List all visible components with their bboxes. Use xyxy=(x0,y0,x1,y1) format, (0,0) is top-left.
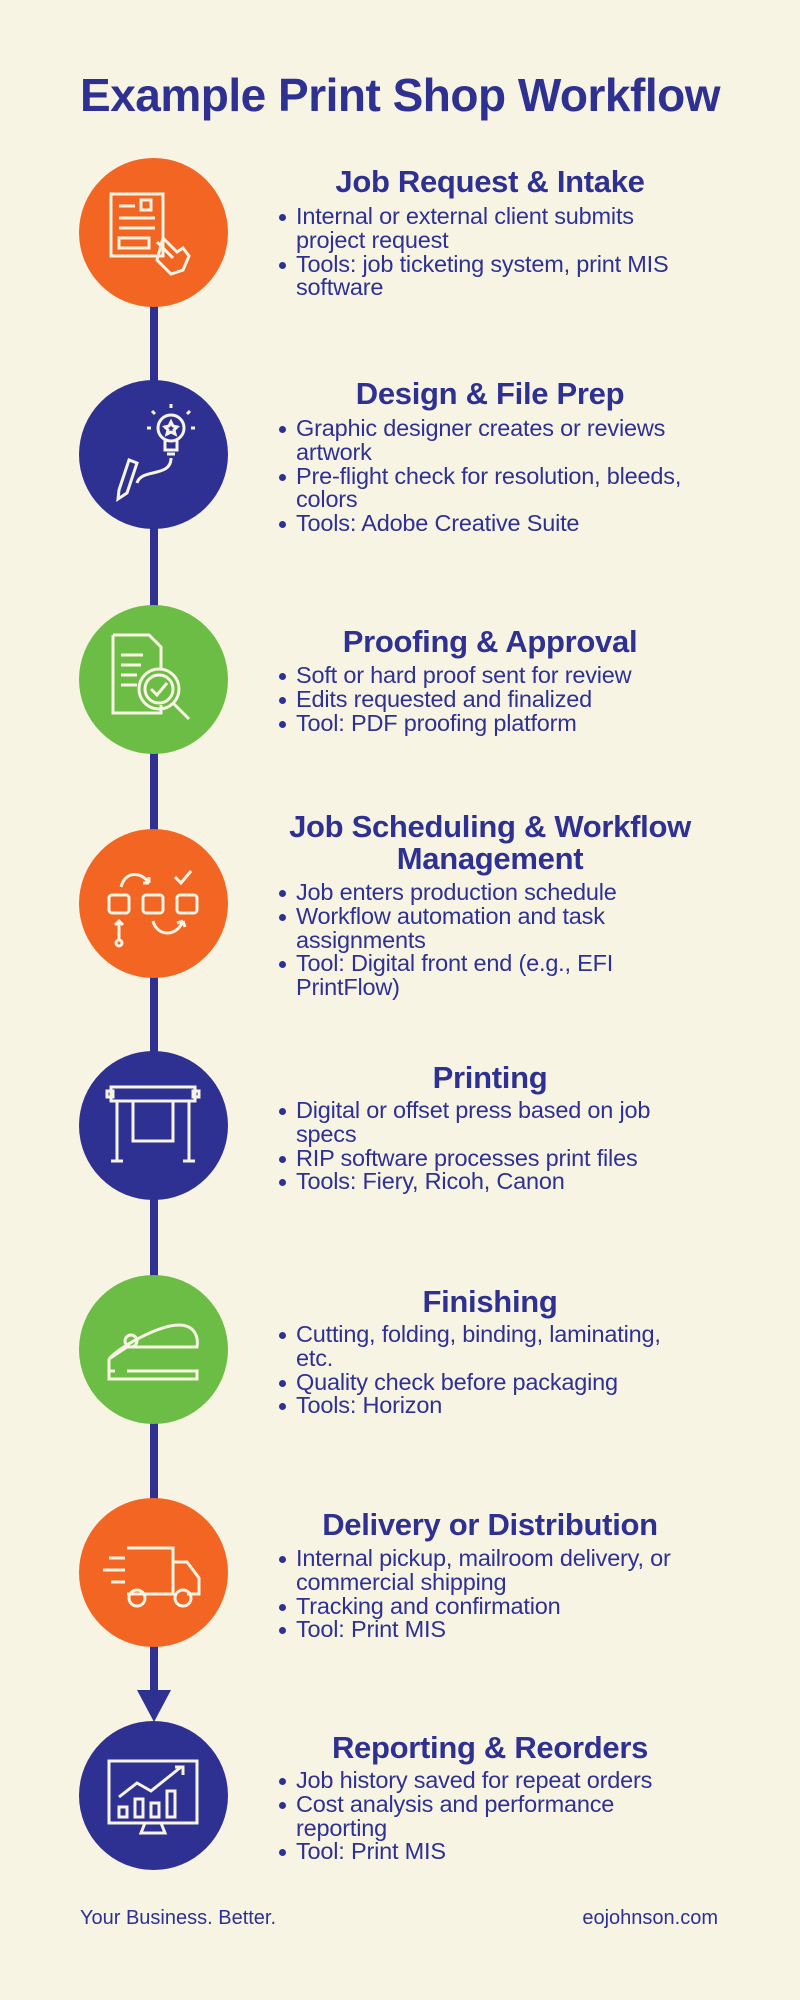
step 1 heading: Job Request & Intake xyxy=(335,164,645,199)
footer left: Your Business. Better. xyxy=(80,1907,276,1929)
step 6 bullets xyxy=(279,1321,661,1418)
step 4 heading xyxy=(289,809,692,876)
step 7 icon xyxy=(79,1498,228,1647)
step 3 bullets xyxy=(279,662,632,736)
step 4 bullets: Tool: Digital front end (e.g., EFI xyxy=(296,950,613,976)
step 7 bullets: Internal pickup, mailroom delivery, or xyxy=(296,1545,671,1571)
step 8 bullets: Tool: Print MIS xyxy=(296,1838,446,1864)
step 3 heading: Proofing & Approval xyxy=(343,624,637,659)
step 5 bullets xyxy=(279,1097,650,1194)
step 4 bullets: PrintFlow) xyxy=(296,974,400,1000)
step 1 bullets: software xyxy=(296,274,383,300)
step 4 icon xyxy=(79,829,228,978)
step 1 bullets: Tools: job ticketing system, print MIS xyxy=(296,251,668,277)
step 5 bullets: Tools: Fiery, Ricoh, Canon xyxy=(296,1168,565,1194)
step 8 bullets xyxy=(279,1767,652,1864)
step 6 icon xyxy=(79,1275,228,1424)
step 7 bullets: Tool: Print MIS xyxy=(296,1616,446,1642)
timeline line xyxy=(150,300,158,1695)
step 4 bullets: Job enters production schedule xyxy=(296,879,617,905)
title: Example Print Shop Workflow xyxy=(80,69,720,121)
step 4 heading: Job Scheduling & Workflow xyxy=(289,809,691,844)
step 2 bullets: colors xyxy=(296,486,358,512)
step 7 bullets: commercial shipping xyxy=(296,1569,506,1595)
step 5 bullets: Digital or offset press based on job xyxy=(296,1097,650,1123)
step 4 bullets xyxy=(279,879,617,1000)
step 2 bullets: artwork xyxy=(296,439,372,465)
step 8 icon xyxy=(79,1721,228,1870)
step 5 heading: Printing xyxy=(433,1060,547,1095)
step 8 bullets: reporting xyxy=(296,1815,387,1841)
step 1 bullets: project request xyxy=(296,227,448,253)
step 6 bullets: etc. xyxy=(296,1345,333,1371)
step 4 heading: Management xyxy=(397,841,583,876)
step 6 bullets: Quality check before packaging xyxy=(296,1369,618,1395)
step 7 bullets: Tracking and confirmation xyxy=(296,1593,561,1619)
step 5 bullets: RIP software processes print files xyxy=(296,1145,638,1171)
step 8 bullets: Cost analysis and performance xyxy=(296,1791,614,1817)
step 2 bullets: Graphic designer creates or reviews xyxy=(296,415,665,441)
step 3 icon xyxy=(79,605,228,754)
step 6 bullets: Tools: Horizon xyxy=(296,1392,442,1418)
step 1 bullets: Internal or external client submits xyxy=(296,203,634,229)
step 2 bullets: Tools: Adobe Creative Suite xyxy=(296,510,579,536)
step 1 bullets xyxy=(279,203,668,300)
step 7 heading: Delivery or Distribution xyxy=(322,1507,658,1542)
step 5 bullets: specs xyxy=(296,1121,356,1147)
step 3 bullets: Tool: PDF proofing platform xyxy=(296,710,577,736)
step 4 bullets: Workflow automation and task xyxy=(296,903,605,929)
step 3 bullets: Soft or hard proof sent for review xyxy=(296,662,631,688)
step 8 bullets: Job history saved for repeat orders xyxy=(296,1767,652,1793)
step 2 heading: Design & File Prep xyxy=(356,376,624,411)
footer right: eojohnson.com xyxy=(582,1907,718,1929)
step 3 bullets: Edits requested and finalized xyxy=(296,686,592,712)
step 4 bullets: assignments xyxy=(296,927,426,953)
step 7 bullets xyxy=(279,1545,671,1642)
arrow head xyxy=(137,1690,171,1722)
step 2 bullets xyxy=(279,415,681,536)
step 8 heading: Reporting & Reorders xyxy=(332,1730,648,1765)
step 5 icon xyxy=(79,1051,228,1200)
step 6 heading: Finishing xyxy=(422,1284,558,1319)
step 1 icon xyxy=(79,158,228,307)
step 2 icon xyxy=(79,380,228,529)
step 6 bullets: Cutting, folding, binding, laminating, xyxy=(296,1321,661,1347)
step 2 bullets: Pre-flight check for resolution, bleeds, xyxy=(296,463,681,489)
